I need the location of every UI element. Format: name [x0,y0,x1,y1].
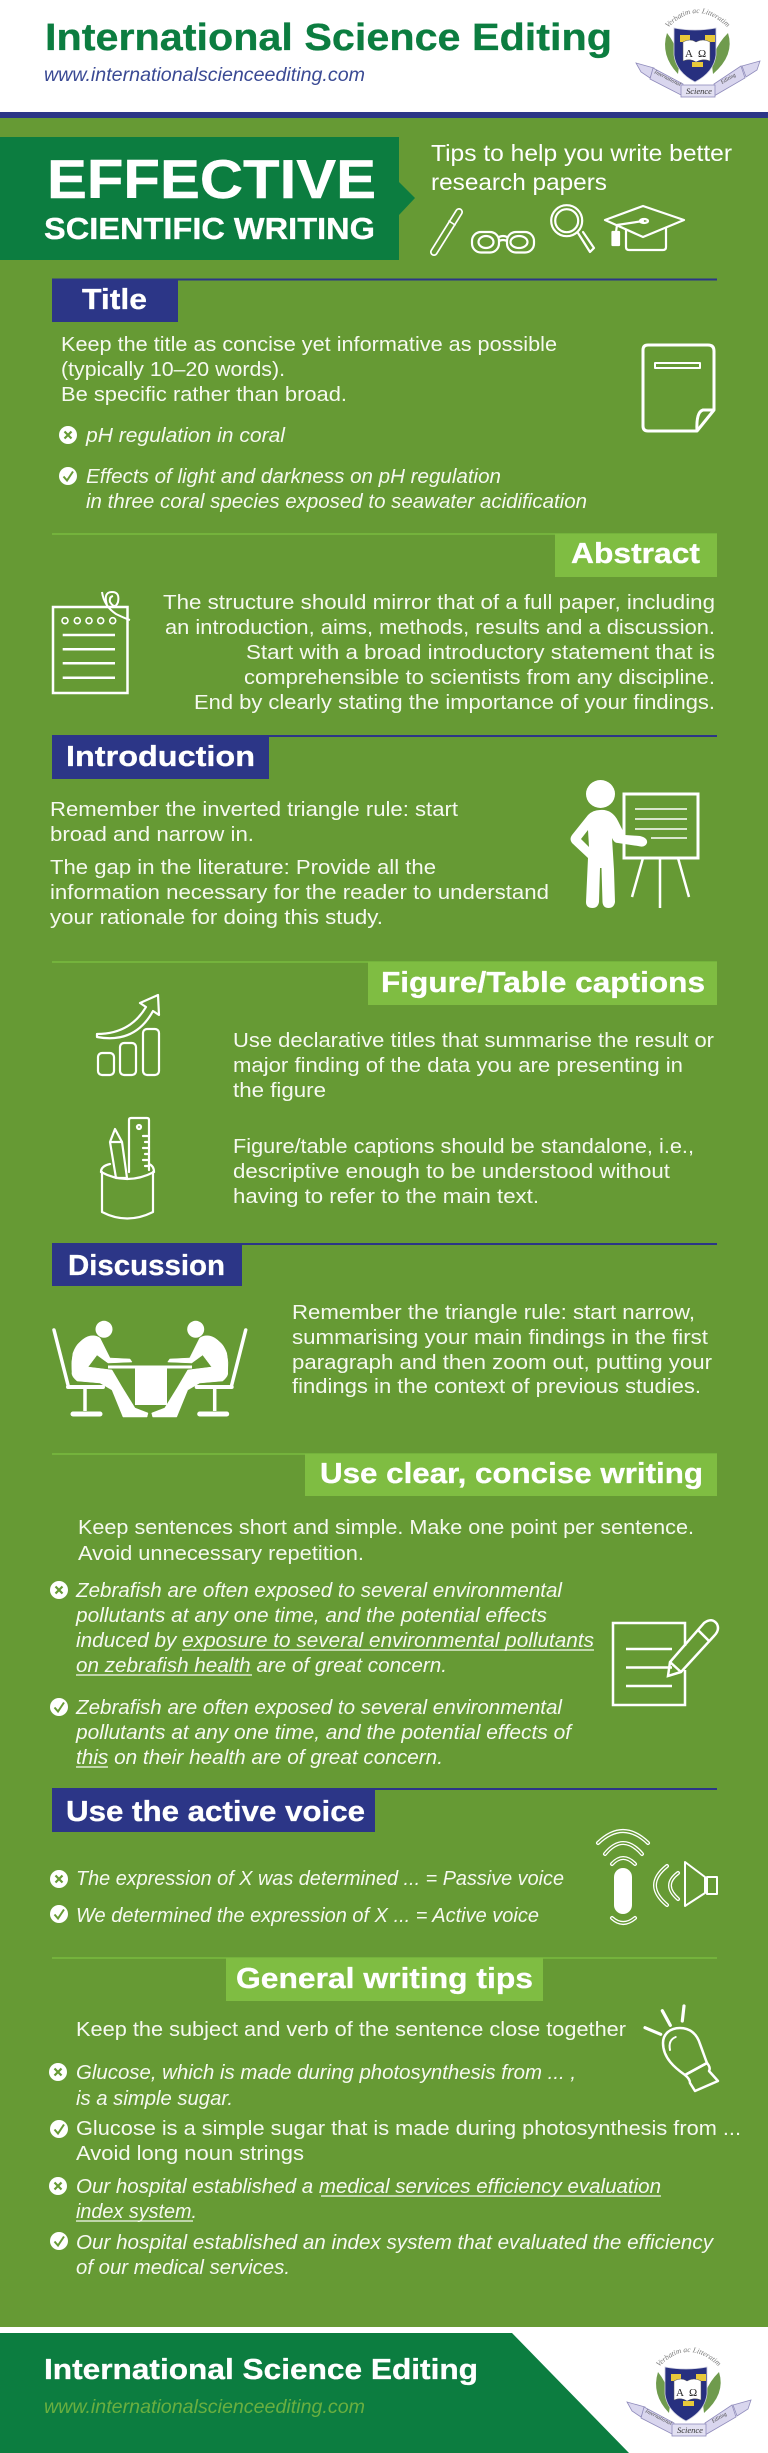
bad zebrafish example: pollutants at any one time, and the potential effects [75,1604,547,1627]
heading: discussion [52,1244,242,1286]
good hospital example: of our medical services. [76,2256,290,2279]
footer logo crest [626,2348,752,2436]
good zebrafish example: pollutants at any one time, and the potential effects of [75,1721,573,1744]
discussion text: findings in the context of previous studies. [292,1375,701,1398]
footer logo crest: Verbatim ac Litteratim [656,2348,720,2366]
icon: document [643,345,714,431]
panel: figure and table captions [52,961,717,1218]
bad zebrafish example [75,1579,594,1677]
icon: correct [50,1905,68,1923]
icon: correct [50,1698,68,1716]
panel: title [52,278,717,513]
footer logo crest: Editing [710,2411,728,2425]
icon: magnifier [551,205,594,252]
abstract text: The structure should mirror that of a full paper, including [163,591,715,614]
introduction text: The gap in the literature: Provide all the [50,856,436,879]
discussion text: summarising your main findings in the first [292,1326,708,1349]
footer [0,2327,768,2453]
standalone captions text: Figure/table captions should be standalone, i.e., [233,1135,694,1158]
good hospital example: Our hospital established an index system that evaluated the efficiency [76,2231,715,2254]
footer brand name: International Science Editing [44,2354,478,2386]
bad example: pH regulation in coral [85,424,286,447]
declarative titles text: major finding of the data you are presenting in [233,1054,683,1077]
tagline: research papers [431,169,607,195]
icon: correct [50,2120,68,2138]
icon: light bulb [645,2006,718,2091]
icon: pen [434,212,459,252]
heading: title [52,279,178,322]
introduction text [50,798,549,929]
panel: general writing tips [49,1957,741,2279]
logo crest: Editing [719,72,737,86]
title advice text [61,333,557,406]
footer logo crest: Α [676,2387,684,2399]
icon: wrong [49,2177,67,2195]
declarative titles text: the figure [233,1079,326,1102]
good hospital example [76,2231,715,2279]
header [0,0,768,118]
footer logo crest: Ω [689,2387,697,2399]
bad hospital example: Our hospital established a medical services efficiency evaluation [76,2175,661,2198]
title banner [0,137,415,260]
passive voice example: The expression of X was determined ... = Passive voice [76,1867,564,1890]
standalone captions text: having to refer to the main text. [233,1185,539,1208]
active voice example: We determined the expression of X ... = Active voice [76,1904,539,1927]
icon: presenter at board [570,780,698,908]
good zebrafish example [75,1696,573,1769]
icon: notepad [53,592,130,693]
abstract text: an introduction, aims, methods, results and a discussion. [165,616,715,639]
logo crest: Verbatim ac Litteratim [664,8,730,28]
icon: correct [50,2232,68,2250]
abstract text: End by clearly stating the importance of your findings. [194,691,715,714]
icon: graduation cap [605,206,684,250]
panel: use the active voice [50,1788,717,1927]
declarative titles text: Use declarative titles that summarise the result or [233,1029,714,1052]
icon: microphone [598,1831,648,1923]
icon: wrong [59,426,77,444]
heading: abstract [555,534,717,577]
concise writing advice: Avoid unnecessary repetition. [78,1542,364,1565]
good glucose example [76,2117,741,2165]
website url: www.internationalscienceediting.com [44,64,365,86]
icon: wrong [50,1581,68,1599]
good zebrafish example: this on their health are of great concern. [76,1746,443,1769]
good glucose example: Glucose is a simple sugar that is made during photosynthesis from ... [76,2117,741,2140]
panel: abstract [52,533,717,714]
bad glucose example: is a simple sugar. [76,2087,233,2110]
good glucose example: Avoid long noun strings [76,2142,304,2165]
good example [86,465,587,513]
logo crest: Ω [698,48,706,60]
bad zebrafish example: induced by exposure to several environmental pollutants [76,1629,594,1652]
icon: speaker [655,1862,717,1906]
bad glucose example: Glucose, which is made during photosynthesis from ... , [76,2061,576,2084]
icon: rising bar chart [97,995,159,1075]
heading: discussion: Discussion [68,1250,225,1282]
footer website url: www.internationalscienceediting.com [44,2396,365,2418]
icon: pencil cup [101,1118,154,1218]
panel: discussion [52,1243,717,1417]
icon: glasses [472,232,534,252]
bad zebrafish example: Zebrafish are often exposed to several environmental [75,1579,563,1602]
good zebrafish example: Zebrafish are often exposed to several environmental [75,1696,563,1719]
introduction text: broad and narrow in. [50,823,254,846]
concise writing advice [78,1516,694,1565]
standalone captions text: descriptive enough to be understood without [233,1160,670,1183]
heading: abstract: Abstract [571,538,700,570]
abstract text: Start with a broad introductory statement that is [246,641,715,664]
bad hospital example [76,2175,661,2223]
heading: clear concise writing [305,1454,717,1496]
discussion text: Remember the triangle rule: start narrow, [292,1301,695,1324]
main heading: EFFECTIVE [47,148,376,210]
introduction text: Remember the inverted triangle rule: start [50,798,458,821]
heading: general writing tips [226,1958,543,2001]
heading: title: Title [82,284,147,316]
logo crest: International [652,69,682,88]
bad zebrafish example: on zebrafish health are of great concern. [76,1654,447,1677]
concise writing advice: Keep sentences short and simple. Make one point per sentence. [78,1516,694,1539]
heading: figure table captions [368,962,717,1005]
icon: note and pen [613,1620,718,1705]
panel: introduction [50,735,717,929]
title advice text: Be specific rather than broad. [61,383,347,406]
heading: active voice: Use the active voice [66,1796,365,1828]
abstract text: comprehensible to scientists from any discipline. [244,666,715,689]
bad hospital example: index system. [76,2200,197,2223]
heading: introduction [52,736,269,779]
logo crest: Science [686,86,712,96]
subject verb tip: Keep the subject and verb of the sentence close together [76,2018,626,2041]
panel: use clear concise writing [50,1453,718,1769]
heading: figure table captions: Figure/Table captions [381,967,705,999]
introduction text: information necessary for the reader to understand [50,881,549,904]
good example: Effects of light and darkness on pH regulation [86,465,501,488]
good example: in three coral species exposed to seawater acidification [86,490,587,513]
standalone captions text [233,1135,694,1208]
footer logo crest: Science [677,2425,703,2435]
introduction text: your rationale for doing this study. [50,906,383,929]
discussion text: paragraph and then zoom out, putting your [292,1351,712,1374]
declarative titles text [233,1029,714,1102]
footer logo crest: International [643,2408,673,2427]
heading: active voice [52,1789,375,1832]
tagline [431,140,732,195]
heading: clear concise writing: Use clear, concise writing [320,1458,703,1490]
heading: general writing tips: General writing tips [236,1963,533,1995]
icon: wrong [49,2063,67,2081]
title advice text: Keep the title as concise yet informative as possible [61,333,557,356]
heading: introduction: Introduction [66,741,255,773]
tagline: Tips to help you write better [431,140,732,166]
abstract text [163,591,715,714]
logo crest: Α [685,48,693,60]
icon: correct [59,467,77,485]
discussion text [292,1301,712,1398]
brand name: International Science Editing [45,17,612,59]
bad glucose example [76,2061,576,2110]
sub heading: SCIENTIFIC WRITING [44,211,375,246]
icon: wrong [50,1870,68,1888]
icon: two people at a table [54,1321,246,1417]
title advice text: (typically 10–20 words). [61,358,285,381]
logo crest [635,8,760,98]
